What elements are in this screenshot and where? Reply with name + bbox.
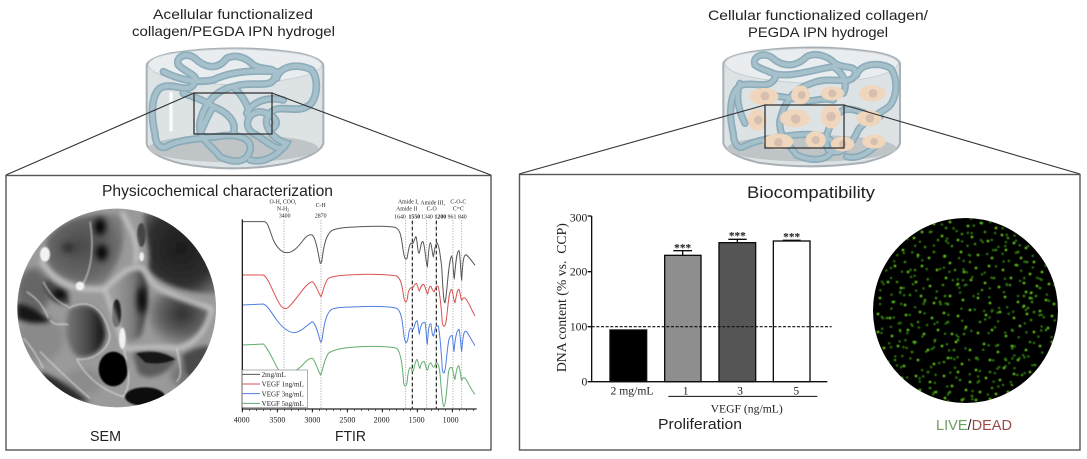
- legend: VEGF 3ng/mL: [262, 390, 304, 398]
- peak annotations: [269, 200, 467, 220]
- y axis labels: 100: [570, 321, 588, 334]
- peak annotations: 1340: [421, 214, 433, 220]
- peak annotations: O-H, COO,: [269, 200, 297, 206]
- y axis labels: 200: [570, 266, 588, 279]
- legend: VEGF 1ng/mL: [262, 381, 304, 389]
- x axis labels: [610, 384, 799, 415]
- peak annotations: C-H: [316, 203, 326, 209]
- x tick labels: 2500: [339, 415, 355, 424]
- peak annotations: C=C: [453, 206, 464, 212]
- panel: physicochemical characterization: [6, 176, 491, 450]
- title: acellular hydrogel: collagen/PEGDA IPN hydrogel: [132, 23, 335, 39]
- title: cellular hydrogel: PEGDA IPN hydrogel: [748, 24, 888, 40]
- axes: [588, 216, 827, 382]
- x axis labels: 5: [793, 384, 799, 397]
- peak annotations: N-H: [277, 206, 287, 212]
- sem walls texture: [17, 268, 210, 395]
- legend: VEGF 5ng/mL: [262, 400, 304, 408]
- panel: biocompatibility: [520, 174, 1087, 450]
- peak annotations: Amide I,: [398, 200, 419, 206]
- title: cellular hydrogel: [708, 7, 928, 40]
- peak annotations: 961: [448, 214, 456, 220]
- sem dark holes: [99, 223, 176, 406]
- peak guides: [284, 220, 462, 408]
- zoom lines: cellular: [519, 105, 1080, 174]
- spectrum curves: [242, 222, 475, 407]
- x axis labels: 1: [683, 384, 689, 397]
- chart: FTIR spectra: [234, 200, 477, 424]
- x axis labels: 3: [737, 384, 743, 397]
- peak annotations: Amide III,: [420, 200, 446, 206]
- sem bright blobs: [40, 247, 144, 349]
- title: acellular hydrogel: Acellular functionalized: [153, 6, 313, 22]
- icon: cellular hydrogel cylinder: [723, 47, 900, 166]
- peak annotations: Amide II: [396, 206, 417, 212]
- x axis labels: 2 mg/mL: [610, 384, 654, 397]
- peak annotations: C-O: [427, 206, 437, 212]
- zoom lines: acellular: [6, 93, 491, 175]
- significance stars: ***: [783, 232, 800, 244]
- peak annotations: 1640: [394, 214, 406, 220]
- image: live/dead micrograph: [873, 218, 1058, 403]
- y axis labels: 0: [582, 376, 588, 389]
- y axis title: DNA content (% vs. CCP): [554, 223, 570, 372]
- peak annotations: 840: [458, 214, 467, 220]
- peak annotations: C-O-C: [450, 200, 466, 206]
- peak annotations: 3400: [279, 214, 291, 220]
- icon: acellular hydrogel cylinder: [147, 48, 323, 168]
- y axis labels: [570, 211, 588, 389]
- peak annotations: 2870: [315, 214, 327, 220]
- peak annotations: 1200: [435, 214, 446, 220]
- x tick labels: 3500: [269, 415, 285, 424]
- bars: [610, 241, 810, 382]
- legend: 2mg/mL: [262, 371, 286, 379]
- peak annotations: 2: [287, 208, 289, 212]
- peak annotations: 1550: [409, 214, 420, 220]
- axes: [242, 219, 477, 412]
- x tick labels: 4000: [234, 415, 250, 424]
- significance stars: ***: [729, 230, 746, 242]
- legend: [242, 370, 308, 408]
- x tick labels: 2000: [374, 415, 390, 424]
- sem ridges: [41, 212, 213, 348]
- significance stars: ***: [674, 242, 691, 254]
- label: proliferation: Proliferation: [658, 416, 742, 433]
- title: cellular hydrogel: Cellular functionalized collagen/: [708, 7, 928, 23]
- x tick labels: [234, 415, 459, 424]
- label: FTIR: FTIR: [335, 429, 366, 445]
- sem pores: [17, 212, 218, 402]
- title: acellular hydrogel: [132, 6, 335, 39]
- chart: DNA content bars: [554, 211, 832, 415]
- x axis labels: VEGF (ng/mL): [711, 402, 783, 415]
- x tick labels: 1000: [443, 415, 459, 424]
- heading: biocompatibility: Biocompatibility: [747, 183, 876, 202]
- reference line at 100: [592, 325, 832, 328]
- error bars: [673, 239, 801, 255]
- heading: physicochemical: Physicochemical characterization: [102, 183, 333, 200]
- x tick labels: 3000: [304, 415, 320, 424]
- label: SEM: SEM: [90, 429, 121, 445]
- label: LIVE/DEAD: LIVE/DEAD: [936, 417, 1012, 434]
- significance stars: [674, 230, 800, 254]
- y axis labels: 300: [570, 211, 588, 224]
- x tick labels: 1500: [409, 415, 425, 424]
- image: SEM micrograph: [17, 208, 216, 408]
